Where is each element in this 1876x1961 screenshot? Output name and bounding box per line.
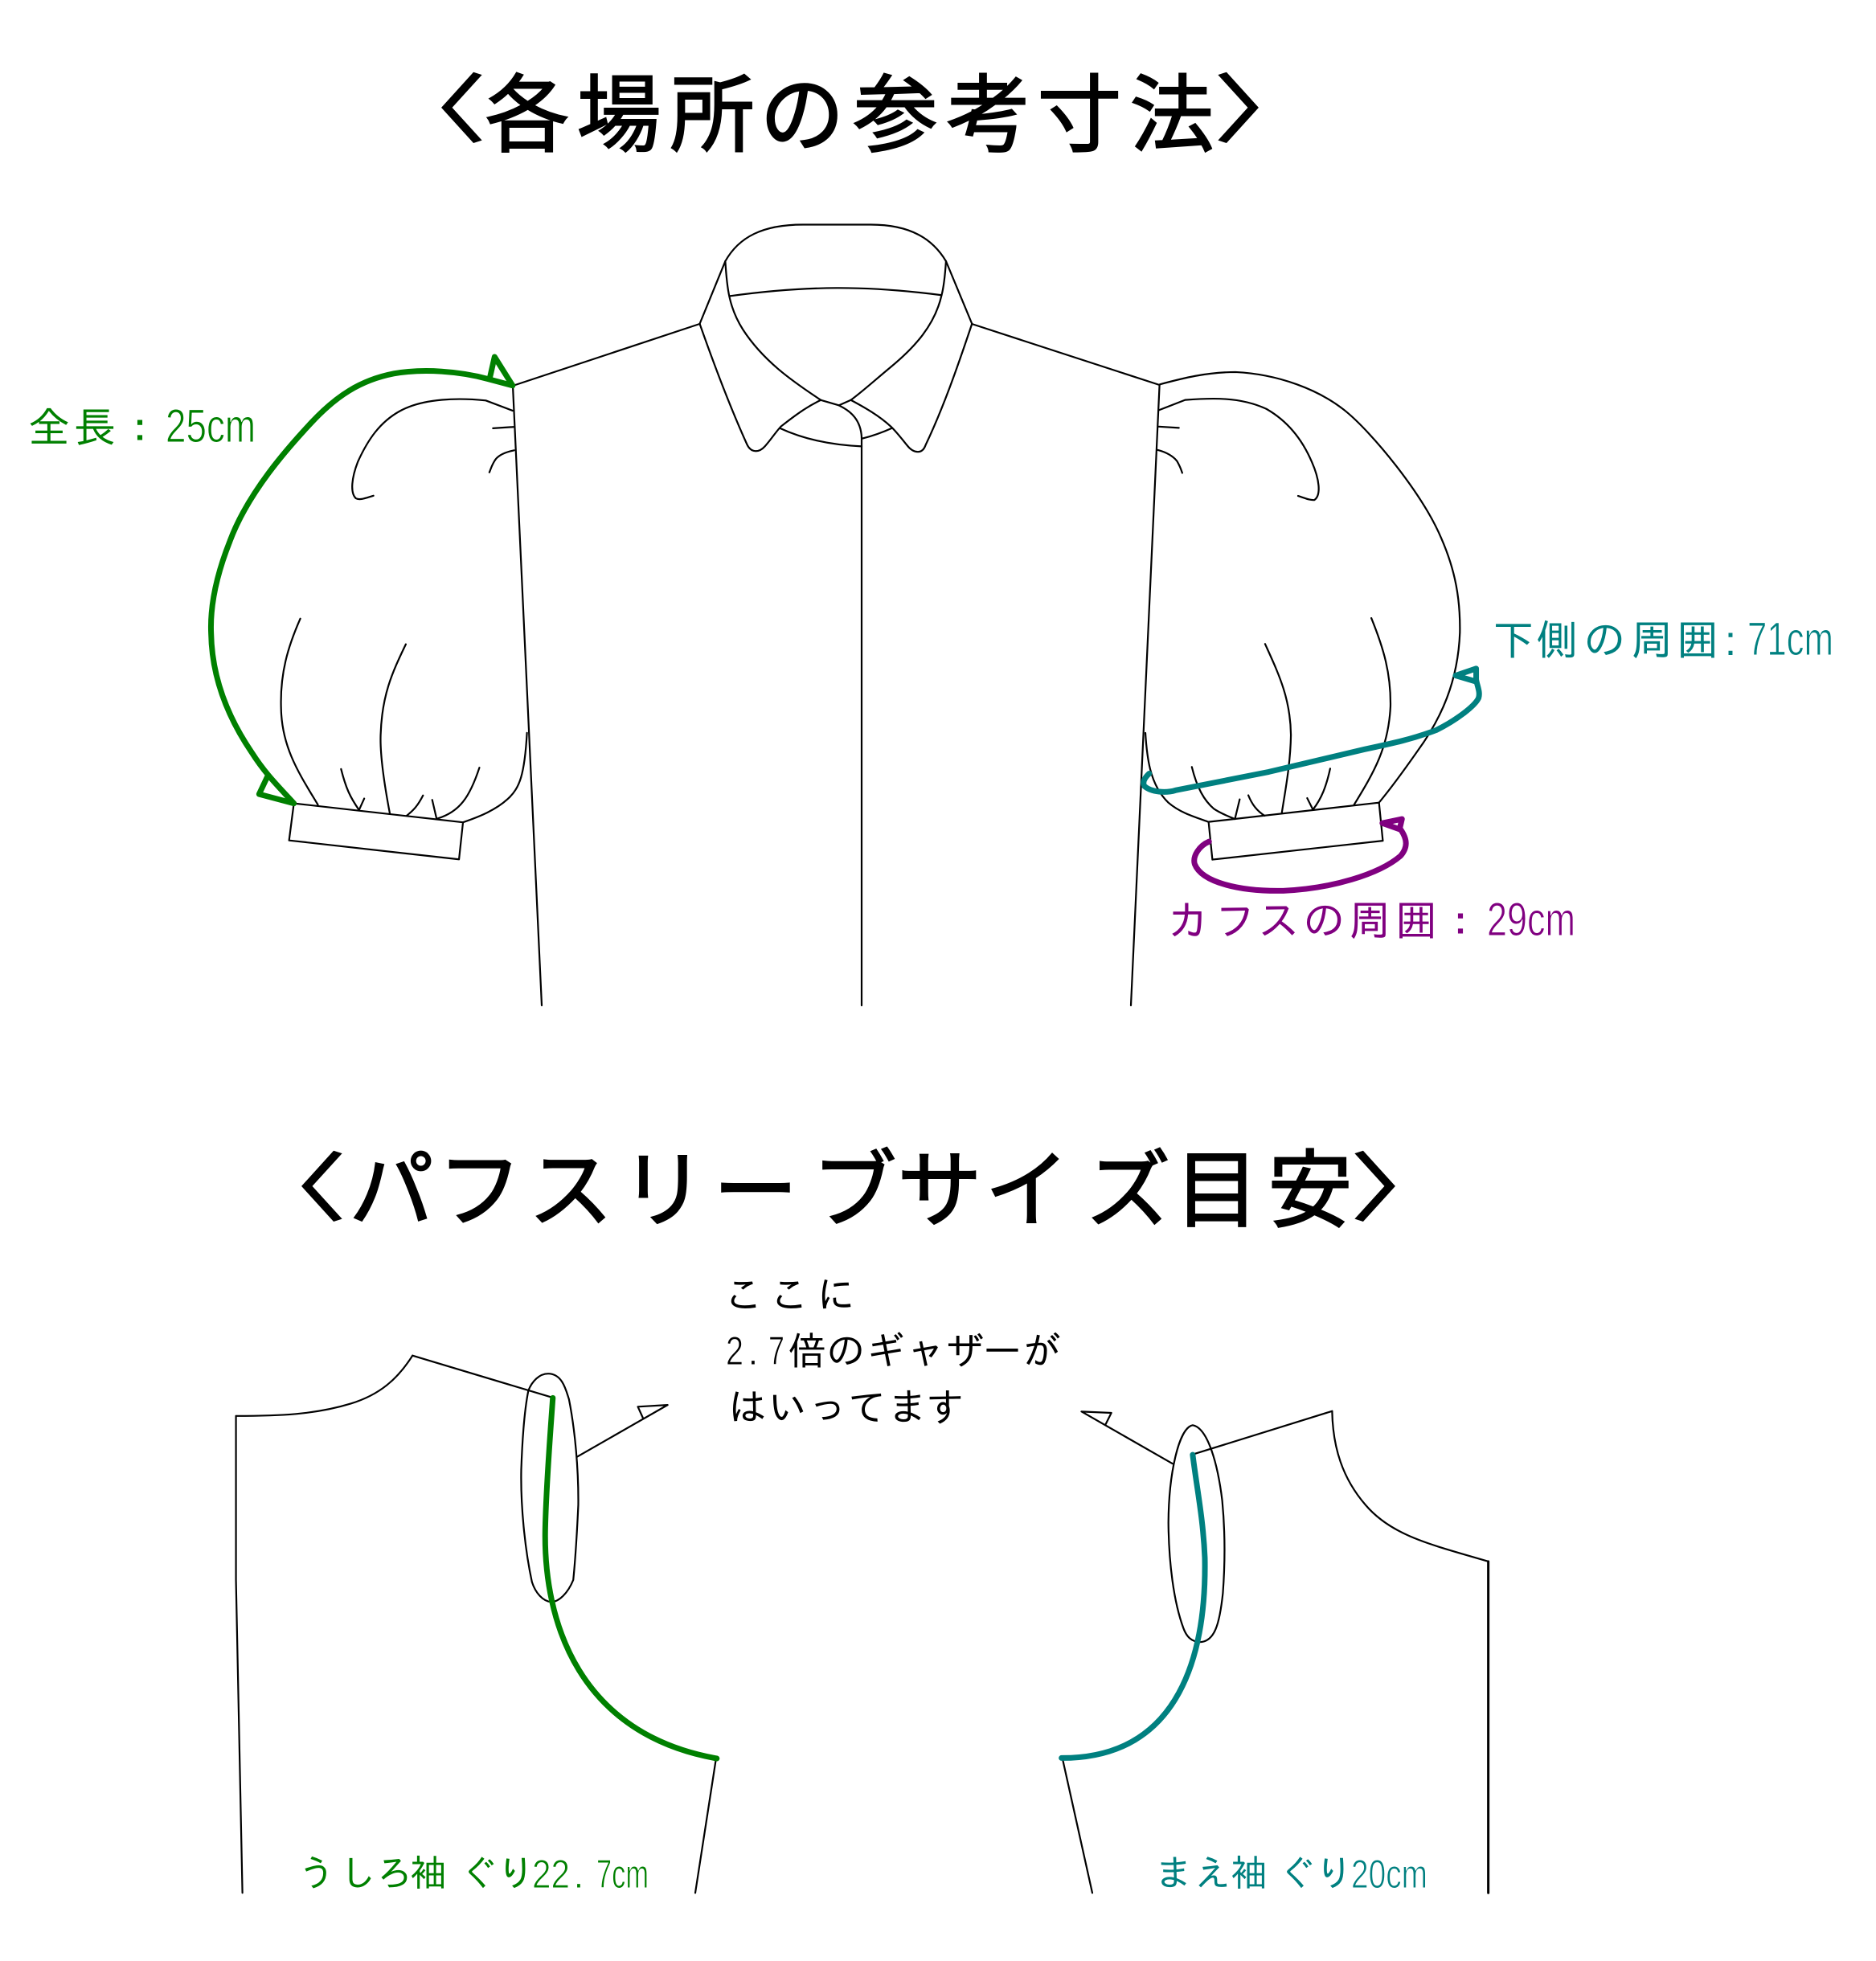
front bodice pattern [1062, 1411, 1489, 1893]
label: lower circumference: 71cm [1747, 613, 1833, 665]
label: total length: 25cm [166, 400, 256, 452]
right puff sleeve [1144, 372, 1479, 890]
back bodice pattern [236, 1356, 717, 1893]
green length arrow [211, 357, 513, 804]
title: reference measurements: 各場所の参考寸法 [485, 69, 1214, 163]
gather note text: 7 [768, 1328, 784, 1374]
gather oval front [1169, 1425, 1224, 1642]
label: front armhole [1155, 1852, 1427, 1897]
gather note text: ここに [724, 1275, 855, 1317]
leader arrow back [577, 1405, 668, 1457]
title: puff sleeve size guide: 〈 [240, 1148, 346, 1230]
label: cuff circumference: 29cm [1487, 894, 1575, 946]
label: total length [28, 400, 256, 452]
label: back armhole [298, 1852, 649, 1897]
title: puff sleeve size guide: パフスリーブサイズ目安 [349, 1144, 1353, 1238]
title: puff sleeve size guide: 〉 [1350, 1148, 1456, 1230]
label: back armhole: 22 [532, 1852, 570, 1897]
gather oval back [521, 1374, 578, 1602]
leader arrow front [1082, 1411, 1173, 1464]
label: cuff circumference: カフスの周囲： [1167, 899, 1481, 945]
teal hem circumference arrow [1144, 669, 1479, 792]
gather note text [724, 1275, 1061, 1430]
shirt body outline [513, 324, 1160, 1005]
label: front armhole: まえ袖ぐり [1155, 1853, 1353, 1894]
left puff sleeve [211, 357, 527, 859]
label: back armhole: うしろ袖ぐり [298, 1853, 535, 1894]
gather note text: 倍のギャザーが [788, 1331, 1061, 1374]
gather note text: . [748, 1328, 759, 1374]
label: lower circumference [1493, 613, 1833, 665]
purple cuff circumference arrow [1194, 819, 1406, 890]
gather note text: 2 [726, 1328, 743, 1374]
label: back armhole: 7cm [596, 1852, 649, 1897]
label: front armhole: 20cm [1351, 1852, 1427, 1897]
back armhole [545, 1398, 717, 1758]
shirt collar [700, 224, 972, 452]
title: reference measurements: 〈 [380, 69, 486, 152]
label: back armhole: . [573, 1852, 584, 1897]
label: cuff circumference [1167, 894, 1575, 946]
title: reference measurements: 〉 [1214, 69, 1320, 152]
right cuff [1209, 803, 1382, 860]
label: total length: 全長： [28, 405, 161, 452]
left cuff [289, 804, 463, 859]
label: lower circumference: 下側の周囲: [1493, 618, 1736, 665]
front armhole [1062, 1455, 1205, 1758]
gather note text: はいってます [728, 1387, 965, 1430]
